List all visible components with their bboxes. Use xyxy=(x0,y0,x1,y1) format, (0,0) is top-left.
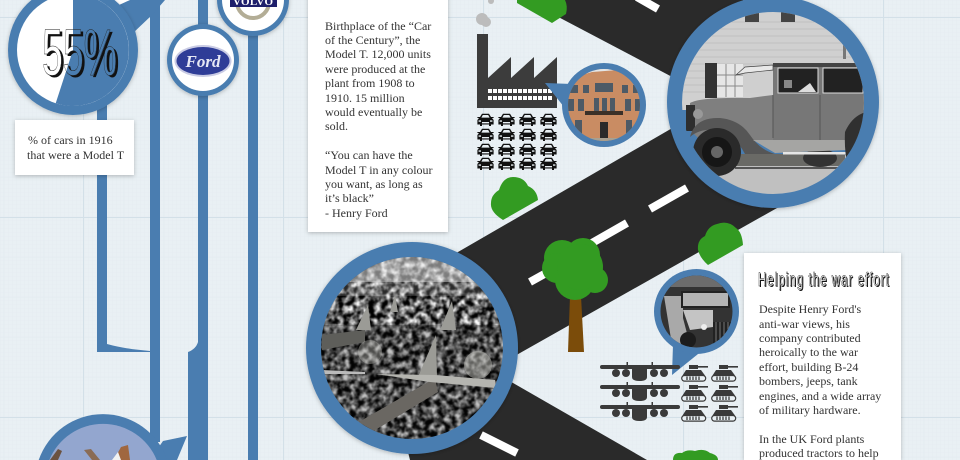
text panel: Model T: plant from 1908 to xyxy=(325,76,415,90)
text panel: war effort: heroically to the war xyxy=(759,345,858,359)
pie chart: 55 percent: 55% xyxy=(42,15,117,89)
heading: Helping the war effort: Helping the war effort xyxy=(759,271,890,292)
icon: bottom bush xyxy=(673,450,718,460)
text panel: war effort xyxy=(744,253,901,460)
text panel: war effort: In the UK Ford plants xyxy=(759,432,865,446)
photo: Model T car xyxy=(667,0,879,208)
text panel: Model T: it’s black” xyxy=(325,191,374,205)
text panel: Model T: sold. xyxy=(325,119,348,133)
timeline connector lines xyxy=(97,0,258,460)
text panel: Model T: “You can have the xyxy=(325,148,413,162)
text panel: war effort: engines, and a wide array xyxy=(759,389,881,403)
text panel: Model T: 1910. 15 million xyxy=(325,91,405,105)
text panel: war effort: bombers, jeeps, tank xyxy=(759,374,858,388)
text panel: Model T: you want, as long as xyxy=(325,177,423,191)
text panel: Model T: were produced at the xyxy=(325,62,425,76)
text panel: war effort: produced tractors to help xyxy=(759,446,879,460)
text panel: Model T: Birthplace of the “Car xyxy=(325,19,431,33)
icon: bush near jeep xyxy=(698,223,743,265)
icon grid: bombers xyxy=(600,362,680,421)
text panel: war effort: effort, building B-24 xyxy=(759,360,858,374)
logo badge: Ford xyxy=(167,24,239,96)
caption: percentage of cars xyxy=(15,120,134,175)
logo badge: Volvo xyxy=(217,0,289,36)
caption: percentage of cars: that were a Model T xyxy=(27,148,125,162)
pie chart: 55 percent xyxy=(8,0,165,115)
text panel: Model T xyxy=(308,0,448,232)
text panel: Model T: Model T. 12,000 units xyxy=(325,47,431,61)
text panel: Model T: - Henry Ford xyxy=(325,206,388,220)
photo: jeep callout xyxy=(654,269,739,375)
photo: bomber assembly line xyxy=(306,242,518,454)
icon: top bush xyxy=(517,0,567,23)
photo: brick plant callout xyxy=(545,63,646,147)
text panel: Model T: of the Century”, the xyxy=(325,33,420,47)
text panel: Model T: would eventually be xyxy=(325,105,422,119)
icon: factory xyxy=(476,0,557,108)
logo badge: Ford: Ford xyxy=(185,52,221,71)
heading: Helping the war effort: Helping the war effort xyxy=(758,270,889,291)
text panel: war effort: company contributed xyxy=(759,331,861,345)
text panel: Model T: Model T in any colour xyxy=(325,163,433,177)
text panel: war effort: Despite Henry Ford's xyxy=(759,302,861,316)
icon grid: tanks xyxy=(682,365,738,421)
text panel: war effort: anti-war views, his xyxy=(759,317,850,331)
text panel: war effort: of military hardware. xyxy=(759,403,861,417)
pie chart: 55 percent: 55% xyxy=(44,17,120,91)
road xyxy=(400,0,850,460)
caption: percentage of cars: % of cars in 1916 xyxy=(28,133,113,147)
pie chart: 55 percent: 55% xyxy=(42,15,117,89)
icon: tree xyxy=(542,238,608,352)
icon: bush beside road xyxy=(491,177,538,220)
icon grid: 16 cars xyxy=(477,114,557,170)
photo: bottom callout xyxy=(39,414,187,460)
